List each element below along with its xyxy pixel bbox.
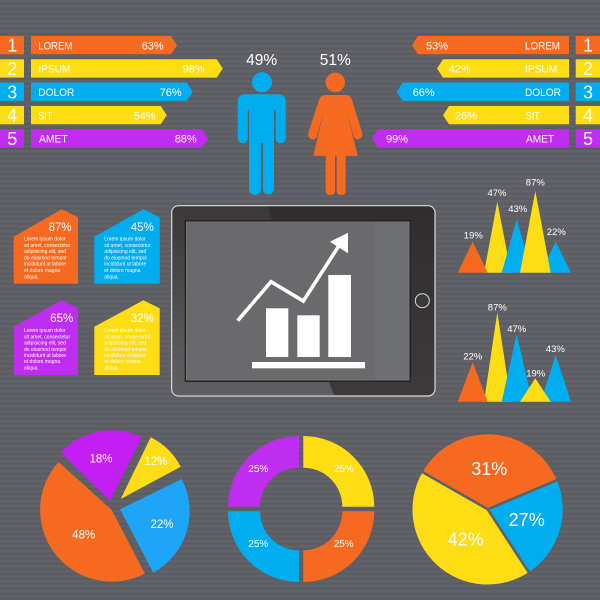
chart: donut: 25% <box>248 539 268 550</box>
chart: triangle chart bottom: 87% <box>488 302 507 313</box>
panel: yellow note 32%: sit amet, consectetur <box>104 334 151 340</box>
row 3 left: 76% <box>160 87 182 99</box>
panel: yellow note 32%: adipisicing elit, sed <box>104 341 146 347</box>
panel: orange note 87%: adipisicing elit, sed <box>24 249 66 255</box>
panel: blue note 45%: sit amet, consectetur <box>104 243 151 249</box>
panel: purple note 65%: 65% <box>50 313 73 325</box>
row 2 right: 2 <box>583 59 593 79</box>
panel: purple note 65%: incididunt ut labore <box>24 353 66 359</box>
chart: donut: 25% <box>248 464 268 475</box>
row 1 right: LOREM <box>525 40 560 52</box>
panel: purple note 65% <box>14 300 78 375</box>
panel: yellow note 32%: do eiusmod tempor <box>104 347 147 353</box>
row 3 left: DOLOR <box>38 87 74 99</box>
chart: large pie <box>412 434 563 585</box>
row 2 right: 42% <box>449 64 471 76</box>
chart: triangle chart top: 22% <box>547 227 566 238</box>
panel: blue note 45%: Lorem ipsum dolor <box>104 236 146 242</box>
row 4 right: 26% <box>455 110 477 122</box>
row 3 right: DOLOR <box>525 87 561 99</box>
panel: orange note 87%: sit amet, consectetur <box>24 243 70 249</box>
panel: yellow note 32% <box>94 300 160 375</box>
panel: orange note 87% <box>14 209 78 284</box>
row 4 right: 4 <box>583 106 593 126</box>
row 1 left: 63% <box>142 40 164 52</box>
row 5 right: AMET <box>526 134 554 146</box>
panel: orange note 87%: incididunt ut labore <box>24 262 66 268</box>
row 5 left: 5 <box>7 129 17 149</box>
chart: exploded pie: 18% <box>89 453 113 465</box>
chart: large pie: 27% <box>509 510 545 530</box>
chart: triangle chart bottom: 47% <box>507 324 527 335</box>
panel: purple note 65%: do eiusmod tempor <box>24 347 67 353</box>
row 1 right <box>412 36 600 56</box>
panel: yellow note 32%: 32% <box>131 313 154 325</box>
panel: yellow note 32%: et dolore magna <box>104 359 141 365</box>
row 2 right: IPSUM <box>525 64 557 76</box>
row 4 right: SIT <box>526 110 540 122</box>
row 1 right: 1 <box>583 36 593 56</box>
chart: triangle chart bottom: 43% <box>546 344 565 355</box>
panel: left ranked bars <box>0 36 223 149</box>
chart: triangle chart top: 87% <box>526 177 545 188</box>
panel: blue note 45%: et dolore magna <box>104 268 141 274</box>
panel: orange note 87%: et dolore magna <box>24 268 60 274</box>
panel: blue note 45%: do eiusmod tempor <box>104 255 147 261</box>
icon: woman with 51%: 51% <box>320 52 351 69</box>
row 1 left: 1 <box>7 36 17 56</box>
row 3 left <box>0 82 193 102</box>
row 5 right: 5 <box>583 129 593 149</box>
row 5 left <box>0 129 208 149</box>
panel: purple note 65%: aliqua. <box>24 365 39 371</box>
panel: purple note 65%: et dolore magna <box>24 359 60 365</box>
icon: man with 49%: 49% <box>246 52 277 69</box>
panel: orange note 87%: 87% <box>48 222 72 234</box>
row 4 left: 4 <box>7 106 17 126</box>
icon: growth chart <box>238 233 365 368</box>
icon: woman with 51% <box>308 52 362 195</box>
row 2 right <box>437 59 600 79</box>
row 3 left: 3 <box>7 82 17 102</box>
chart: large pie: 31% <box>471 459 507 479</box>
row 2 left <box>0 59 223 79</box>
panel: blue note 45%: adipisicing elit, sed <box>104 249 146 255</box>
panel: orange note 87%: aliqua. <box>24 274 39 280</box>
panel: blue note 45%: aliqua. <box>104 274 119 280</box>
panel: blue note 45% <box>94 209 160 284</box>
chart: donut <box>228 436 374 582</box>
row 4 right <box>443 106 600 126</box>
panel: right ranked bars <box>372 36 600 149</box>
chart: large pie: 42% <box>448 530 484 550</box>
panel: purple note 65%: adipisicing elit, sed <box>24 341 66 347</box>
row 4 left: 54% <box>134 110 156 122</box>
icon: man with 49% <box>238 52 286 195</box>
row 4 left: SIT <box>38 110 53 122</box>
panel: purple note 65%: sit amet, consectetur <box>24 334 70 340</box>
chart: triangle chart top: 19% <box>464 230 483 241</box>
row 1 right: 53% <box>426 40 448 52</box>
panel: tablet <box>172 206 435 396</box>
panel: purple note 65%: Lorem ipsum dolor <box>24 328 66 334</box>
row 2 left: 98% <box>183 64 205 76</box>
chart: donut: 25% <box>334 464 354 475</box>
row 2 left: IPSUM <box>38 64 70 76</box>
panel: yellow note 32%: incididunt ut labore <box>104 353 146 359</box>
chart: exploded pie: 12% <box>144 456 168 468</box>
row 1 left: LOREM <box>38 40 72 52</box>
chart: triangle chart top <box>458 177 571 273</box>
icon: home button <box>415 294 429 308</box>
chart: exploded pie <box>40 430 190 582</box>
panel: yellow note 32%: aliqua. <box>104 365 119 371</box>
chart: exploded pie: 48% <box>72 530 95 542</box>
row 5 right: 99% <box>386 134 408 146</box>
row 5 right <box>372 129 600 149</box>
row 3 right: 3 <box>583 82 593 102</box>
chart: triangle chart bottom: 22% <box>463 351 483 362</box>
chart: exploded pie: 22% <box>150 519 174 531</box>
row 3 right <box>397 82 600 102</box>
panel: blue note 45%: 45% <box>131 222 154 234</box>
chart: triangle chart top: 47% <box>487 188 507 199</box>
panel: orange note 87%: do eiusmod tempor <box>24 255 67 261</box>
panel: orange note 87%: Lorem ipsum dolor <box>24 236 66 242</box>
row 5 left: 88% <box>175 134 197 146</box>
row 2 left: 2 <box>7 59 17 79</box>
chart: triangle chart bottom: 19% <box>526 368 546 379</box>
row 4 left <box>0 106 167 126</box>
row 5 left: AMET <box>39 134 68 146</box>
row 3 right: 66% <box>413 87 435 99</box>
chart: donut: 25% <box>334 539 354 550</box>
chart: triangle chart top: 43% <box>508 204 528 215</box>
panel: yellow note 32%: Lorem ipsum dolor <box>104 328 146 334</box>
chart: triangle chart bottom <box>458 302 571 402</box>
row 1 left <box>0 36 177 56</box>
panel: blue note 45%: incididunt ut labore <box>104 262 146 268</box>
